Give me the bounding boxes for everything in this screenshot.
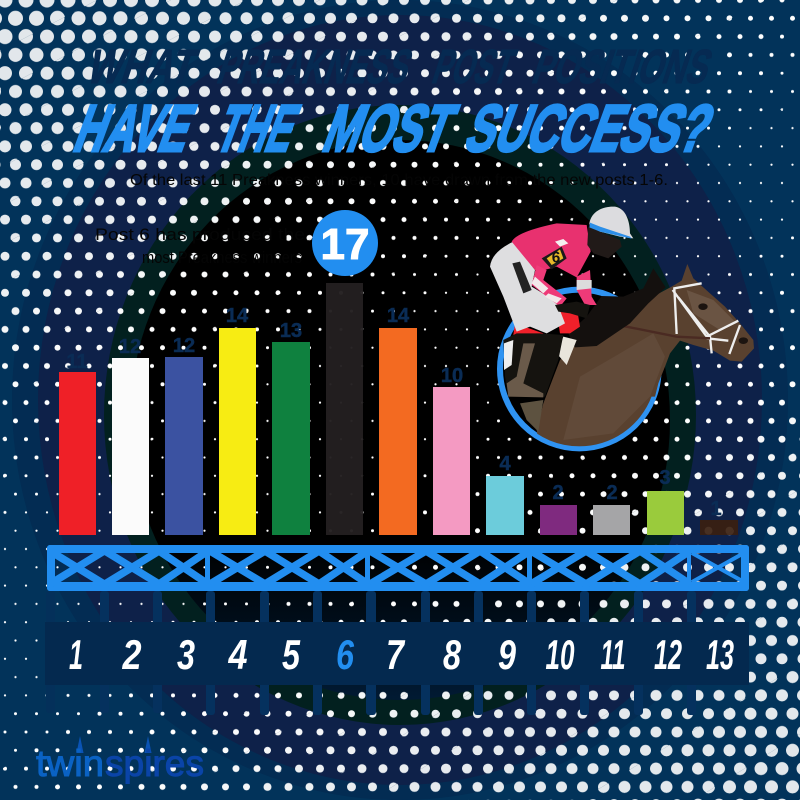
starting gate posts — [46, 591, 696, 715]
post numbers: 11 — [600, 631, 626, 678]
highlighted value badge — [312, 210, 378, 276]
starting gate truss — [47, 545, 749, 591]
post numbers: 2 — [122, 631, 142, 678]
title line 1: POSITIONS — [527, 40, 719, 94]
post numbers: 8 — [443, 631, 461, 678]
jockey and horse illustration — [490, 207, 754, 453]
bar value labels: 2 — [552, 482, 564, 504]
bar value labels: 14 — [387, 305, 410, 327]
bar chart — [59, 283, 738, 535]
post numbers: 3 — [177, 631, 195, 678]
title line 2: HAVE — [66, 92, 205, 166]
title line 1: WHAT — [82, 40, 204, 94]
title line 2 — [66, 92, 724, 166]
post numbers: 13 — [706, 631, 734, 678]
post numbers: 10 — [546, 631, 574, 678]
note: post 6: most Preakness winners — [142, 248, 302, 267]
bar value labels: 1 — [710, 498, 722, 520]
bar value labels: 2 — [606, 482, 618, 504]
post numbers: 6 — [336, 631, 354, 678]
post numbers: 5 — [282, 631, 300, 678]
post number band — [45, 622, 749, 685]
note: post 6 — [95, 225, 305, 267]
bar value labels: 13 — [280, 320, 302, 342]
title line 2: MOST — [315, 92, 466, 166]
title line 1 — [82, 40, 719, 94]
bar value labels: 10 — [441, 365, 463, 387]
jockey and horse illustration: 6 — [552, 250, 560, 267]
bar value labels: 3 — [659, 467, 671, 489]
post numbers: 1 — [69, 631, 83, 678]
subtitle: Of the last 11 Preakness winners, 10 have drawn from the new posts 1-6. — [130, 172, 668, 189]
bar value labels: 12 — [119, 336, 141, 358]
title line 2: THE — [208, 92, 309, 166]
bar value labels: 14 — [226, 305, 249, 327]
bar value labels: 11 — [66, 351, 88, 373]
post numbers: 7 — [386, 631, 405, 678]
note: post 6: Post 6 has produced the — [95, 225, 305, 244]
title line 1: PREAKNESS — [212, 40, 419, 94]
post numbers — [69, 631, 734, 678]
highlighted value badge: 17 — [321, 220, 369, 269]
twinspires logo: spires — [105, 743, 204, 784]
post numbers: 9 — [498, 631, 516, 678]
twinspires logo — [36, 736, 204, 784]
title line 1: POST — [427, 40, 522, 94]
post numbers: 4 — [228, 631, 248, 678]
bar value labels: 4 — [499, 453, 511, 475]
post numbers: 12 — [654, 631, 682, 678]
bar value labels: 12 — [173, 335, 195, 357]
twinspires logo: twin — [36, 743, 104, 784]
bar value labels — [66, 305, 722, 520]
